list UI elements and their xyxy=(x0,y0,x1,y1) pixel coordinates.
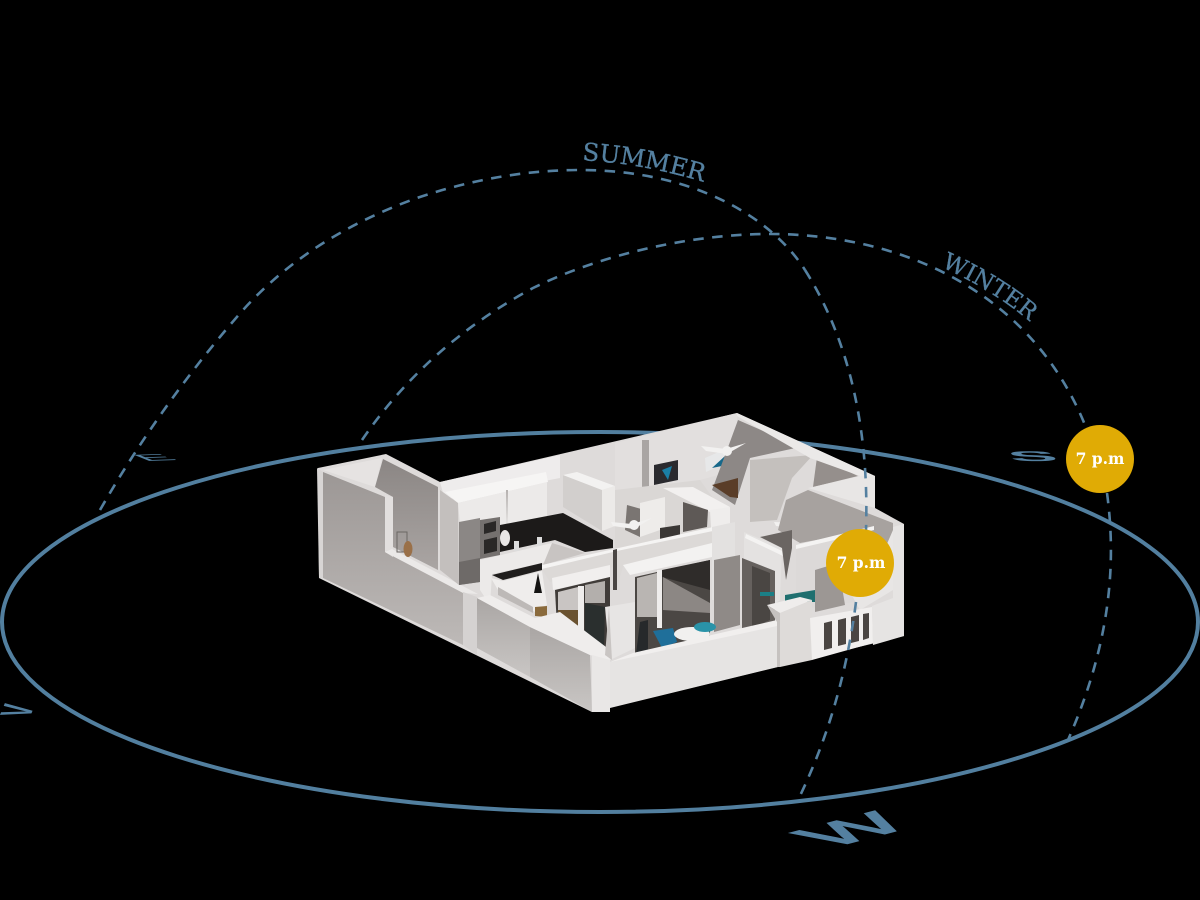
bedroom xyxy=(760,490,893,612)
summer arc left and top section xyxy=(100,170,805,510)
compass letter W: W xyxy=(778,806,926,853)
ceiling fans xyxy=(611,443,818,530)
sun: winter 7 p.m xyxy=(1066,425,1134,493)
compass letter S: S xyxy=(1003,449,1062,464)
balcony railing xyxy=(810,607,873,660)
sun: summer 7 p.m: 7 p.m xyxy=(837,553,886,572)
partition wall and living room xyxy=(542,522,740,655)
kitchen xyxy=(440,455,615,605)
summer arc lower section xyxy=(797,602,856,802)
compass letter E: E xyxy=(126,452,183,463)
hall door xyxy=(742,532,783,632)
sun: winter 7 p.m: 7 p.m xyxy=(1076,449,1125,468)
living room furniture xyxy=(636,620,716,654)
front lower walls xyxy=(477,595,778,712)
horizon ellipse xyxy=(2,432,1198,812)
isometric apartment model xyxy=(317,413,904,712)
winter arc xyxy=(362,234,1111,740)
kitchen island xyxy=(491,563,547,617)
summer arc end over model xyxy=(805,270,866,530)
sun: summer 7 p.m xyxy=(826,529,894,597)
left room walls xyxy=(317,458,478,655)
label: summer: SUMMER xyxy=(584,142,704,182)
balcony post xyxy=(767,597,812,667)
back rooms xyxy=(615,413,875,565)
label: winter: WINTER xyxy=(946,251,1037,322)
stool and hoop by left wall xyxy=(397,532,412,557)
right wall xyxy=(872,524,904,645)
